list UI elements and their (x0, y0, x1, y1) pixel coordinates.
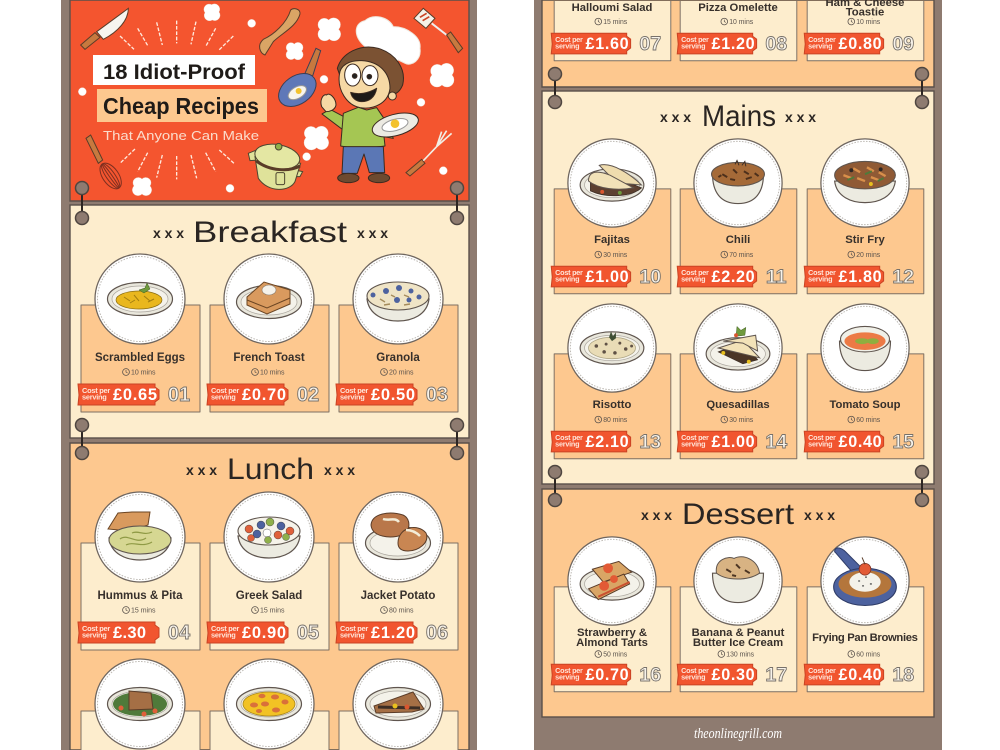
card: Greek Salad: 15 mins (260, 608, 285, 614)
heading: Mains: xxx (660, 109, 691, 125)
card: Pizza Omelette: Cost per (681, 35, 709, 44)
card: Frying Pan Brownies: Frying Pan Brownies (812, 632, 918, 644)
card: Stir Fry (804, 139, 924, 294)
heading: Dessert (641, 498, 835, 531)
card: Banana & Peanut Butter Ice Cream: serving (681, 672, 705, 681)
card: Fajitas: Fajitas (594, 234, 630, 246)
card: Quesadillas: 30 mins (729, 417, 754, 424)
card: Jacket Potato: £1.20 (371, 624, 415, 642)
card: Hummus & Pita (78, 492, 200, 650)
card: Strawberry & Almond Tarts: Strawberry & (577, 627, 647, 639)
card: Halloumi Salad: 07 (639, 33, 661, 55)
heading: Lunch: xxx (324, 462, 355, 478)
brown backing strip: left column (61, 0, 477, 750)
card: Banana & Peanut Butter Ice Cream: Banana & Peanut (692, 627, 785, 639)
food: hummus and pita (108, 512, 171, 560)
card: Jacket Potato: 06 (426, 622, 448, 644)
footer: website: theonlinegrill.com (694, 726, 782, 742)
title banner: 18 Idiot-Proof (93, 55, 255, 85)
card: Greek Salad: 05 (297, 622, 319, 644)
heading: Dessert: Dessert (682, 498, 795, 531)
card: Strawberry & Almond Tarts (551, 537, 671, 692)
card: Fajitas (551, 139, 671, 294)
panel: Dessert (542, 489, 934, 717)
card: Halloumi Salad: Halloumi Salad (572, 2, 652, 14)
card: Hummus & Pita: Hummus & Pita (98, 590, 183, 602)
food: risotto (580, 331, 644, 364)
card: Tomato Soup: 15 (892, 431, 914, 453)
heading: Breakfast: xxx (153, 225, 184, 241)
card: Stir Fry: Stir Fry (845, 234, 885, 246)
food: quesadillas (706, 326, 770, 370)
heading: Lunch: Lunch (227, 453, 314, 486)
card: Frying Pan Brownies: 60 mins (856, 651, 881, 658)
food: stir fry (835, 161, 895, 203)
card: Tomato Soup: Tomato Soup (829, 399, 901, 411)
panel: header (70, 0, 469, 201)
food: pizza omelette (236, 688, 302, 720)
card: Stir Fry: 20 mins (856, 252, 881, 259)
card: Risotto: 13 (639, 431, 661, 453)
card: Hummus & Pita: 15 mins (131, 608, 156, 614)
card: French Toast: French Toast (233, 352, 305, 364)
heading: Mains: xxx (785, 109, 816, 125)
card: Pizza Omelette: £1.20 (712, 35, 755, 53)
card: Fajitas: 10 (639, 266, 661, 288)
card: Banana & Peanut Butter Ice Cream: £0.30 (712, 666, 755, 684)
card: Chili: £2.20 (712, 268, 755, 286)
food: almond tarts (580, 561, 644, 600)
title banner: Cheap Recipes: Cheap Recipes (103, 93, 259, 119)
icon: whisk (86, 135, 126, 193)
card: French Toast: Cost per (211, 386, 239, 395)
card: Chili: Chili (726, 234, 750, 246)
card: Greek Salad: £0.90 (242, 624, 286, 642)
card: Frying Pan Brownies: serving (808, 672, 832, 681)
card: Banana & Peanut Butter Ice Cream: 130 mins (726, 651, 755, 658)
card: Scrambled Eggs: £0.65 (113, 386, 157, 404)
card: Fajitas: serving (555, 274, 579, 283)
card: Chili: 70 mins (729, 252, 754, 259)
card: Ham & Cheese Toastie (804, 0, 924, 61)
heading: Breakfast (153, 216, 388, 249)
card: Tomato Soup: 60 mins (856, 417, 881, 424)
card: Granola (336, 254, 458, 412)
card: Strawberry & Almond Tarts: 16 (639, 664, 661, 686)
card: Jacket Potato: Cost per (340, 624, 368, 633)
card: Granola: Granola (376, 352, 420, 364)
card: Quesadillas: 14 (765, 431, 787, 453)
card: Strawberry & Almond Tarts: Cost per (555, 666, 583, 675)
card: Granola: £0.50 (371, 386, 415, 404)
steam puffs (78, 4, 454, 196)
card: Granola: Cost per (340, 386, 368, 395)
card: Granola: serving (340, 392, 365, 402)
card: Banana & Peanut Butter Ice Cream (677, 537, 797, 692)
card: Stir Fry: 12 (892, 266, 914, 288)
card: Halloumi Salad (551, 1, 671, 61)
card: Tomato Soup (804, 304, 924, 459)
card: Chili: Cost per (681, 268, 709, 277)
card: French Toast: 10 mins (260, 370, 285, 376)
card: Strawberry & Almond Tarts: Almond Tarts (576, 637, 648, 649)
hanging pins between panels (76, 68, 928, 506)
card: Frying Pan Brownies: £0.40 (839, 666, 882, 684)
card: Greek Salad: Cost per (211, 624, 239, 633)
subtitle: That Anyone Can Make (103, 128, 259, 143)
card: Quesadillas: £1.00 (712, 433, 755, 451)
card: Frying Pan Brownies: Cost per (808, 666, 836, 675)
card: Scrambled Eggs (78, 254, 200, 412)
food: Greek salad (238, 517, 300, 558)
card: Risotto: Cost per (555, 433, 583, 442)
card: Pizza Omelette (677, 1, 797, 61)
card: Chili: 11 (766, 266, 787, 288)
card: Stir Fry: £1.80 (839, 268, 882, 286)
panel: Mains (542, 91, 934, 484)
card: French Toast: £0.70 (242, 386, 286, 404)
card: Greek Salad: serving (211, 630, 236, 640)
card: Fajitas: £1.00 (586, 268, 629, 286)
card: Scrambled Eggs: 10 mins (131, 370, 156, 376)
panel: Lunch (left column) (70, 443, 469, 750)
card: Greek Salad: Greek Salad (236, 590, 302, 602)
card: Ham & Cheese Toastie: 09 (892, 33, 914, 55)
card: Halloumi Salad: serving (555, 41, 579, 50)
card: French Toast: serving (211, 392, 236, 402)
card: Pizza Omelette: serving (681, 41, 705, 50)
card: Tomato Soup: Cost per (808, 433, 836, 442)
heading: Lunch (186, 453, 355, 486)
card: Strawberry & Almond Tarts: 50 mins (603, 651, 628, 658)
card: Jacket Potato: serving (340, 630, 365, 640)
card: Risotto: £2.10 (586, 433, 629, 451)
card: Ham & Cheese Toastie: Toastie (846, 7, 884, 19)
heading: Mains: Mains (702, 100, 776, 133)
card: Ham & Cheese Toastie: serving (808, 41, 832, 50)
card: Tomato Soup: serving (808, 439, 832, 448)
card: Chili: serving (681, 274, 705, 283)
icon: spatula (414, 8, 463, 53)
food: granola (367, 282, 429, 321)
food: brownie pan (834, 548, 896, 606)
food: scrambled eggs (108, 282, 172, 316)
food: tomato soup (840, 326, 890, 371)
card: Quesadillas: Cost per (681, 433, 709, 442)
card: Greek Salad (207, 492, 329, 650)
card: Banana & Peanut Butter Ice Cream: Butter Ice Cream (693, 637, 783, 649)
panel: Breakfast (70, 205, 469, 438)
heading: Dessert: xxx (804, 507, 835, 523)
card: Frying Pan Brownies (804, 537, 924, 692)
brown backing strip: right column (534, 0, 942, 750)
card: Ham & Cheese Toastie: Cost per (808, 35, 836, 44)
card: Ham & Cheese Toastie: 10 mins (856, 19, 881, 26)
card: Fajitas: 30 mins (603, 252, 628, 259)
icon: frying pan with egg (272, 48, 322, 113)
icon: wooden spoon (260, 9, 300, 55)
card: Jacket Potato: Jacket Potato (361, 590, 435, 602)
card: French Toast: 02 (297, 384, 319, 406)
card: Jacket Potato (336, 492, 458, 650)
card: Stir Fry: Cost per (808, 268, 836, 277)
card: Pizza Omelette: 10 mins (729, 19, 754, 26)
card: Risotto: 80 mins (603, 417, 628, 424)
heading: Mains (660, 100, 816, 133)
card: Banana & Peanut Butter Ice Cream: 17 (765, 664, 787, 686)
card: Scrambled Eggs: 01 (168, 384, 190, 406)
card: Strawberry & Almond Tarts: serving (555, 672, 579, 681)
card: Risotto: Risotto (593, 399, 632, 411)
card: Quesadillas (677, 304, 797, 459)
card: Scrambled Eggs: Cost per (82, 386, 110, 395)
food: chili (712, 160, 764, 204)
card: Risotto (551, 304, 671, 459)
card: Tomato Soup: £0.40 (839, 433, 882, 451)
card: Stir Fry: serving (808, 274, 832, 283)
card: Hummus & Pita: £.30 (113, 624, 146, 642)
icon: pot (248, 141, 303, 189)
card: Jacket Potato: 80 mins (389, 608, 414, 614)
card: Halloumi Salad: 15 mins (603, 19, 628, 26)
card top: Halloumi Salad dish (81, 659, 200, 750)
card: Pizza Omelette: 08 (765, 33, 787, 55)
card: Granola: 03 (426, 384, 448, 406)
card top: Pizza Omelette dish (210, 659, 329, 750)
card: Chili (677, 139, 797, 294)
heading: Breakfast: Breakfast (193, 216, 348, 249)
card: French Toast (207, 254, 329, 412)
card: Halloumi Salad: £1.60 (586, 35, 629, 53)
chef character (321, 17, 421, 183)
icon: carving fork (406, 131, 452, 176)
card: Scrambled Eggs: serving (82, 392, 107, 402)
food: banana ice cream (713, 557, 763, 603)
food: halloumi salad (108, 688, 172, 720)
card: Scrambled Eggs: Scrambled Eggs (95, 352, 185, 364)
card: Hummus & Pita: Cost per (82, 624, 110, 633)
card: Fajitas: Cost per (555, 268, 583, 277)
food: toastie (366, 688, 430, 720)
card: Hummus & Pita: serving (82, 630, 107, 640)
card: Risotto: serving (555, 439, 579, 448)
card: Quesadillas: Quesadillas (706, 399, 770, 411)
card: Frying Pan Brownies: 18 (892, 664, 914, 686)
panel: Lunch (continued, right column) (542, 0, 934, 87)
food: jacket potato (366, 513, 430, 560)
card: Halloumi Salad: Cost per (555, 35, 583, 44)
heading: Lunch: xxx (186, 462, 217, 478)
card top: Ham & Cheese Toastie dish (339, 659, 458, 750)
card: Strawberry & Almond Tarts: £0.70 (586, 666, 629, 684)
card: Granola: 20 mins (389, 370, 414, 376)
card: Ham & Cheese Toastie: £0.80 (839, 35, 882, 53)
food: french toast (236, 282, 302, 318)
food: fajitas (580, 165, 644, 201)
heading: Dessert: xxx (641, 507, 672, 523)
card: Banana & Peanut Butter Ice Cream: Cost per (681, 666, 709, 675)
icon: knife (81, 8, 128, 49)
card: Pizza Omelette: Pizza Omelette (698, 2, 778, 14)
card: Quesadillas: serving (681, 439, 705, 448)
sunburst rays (120, 21, 234, 179)
heading: Breakfast: xxx (357, 225, 388, 241)
card: Hummus & Pita: 04 (168, 622, 191, 644)
title banner: 18 Idiot-Proof: 18 Idiot-Proof (103, 61, 246, 84)
